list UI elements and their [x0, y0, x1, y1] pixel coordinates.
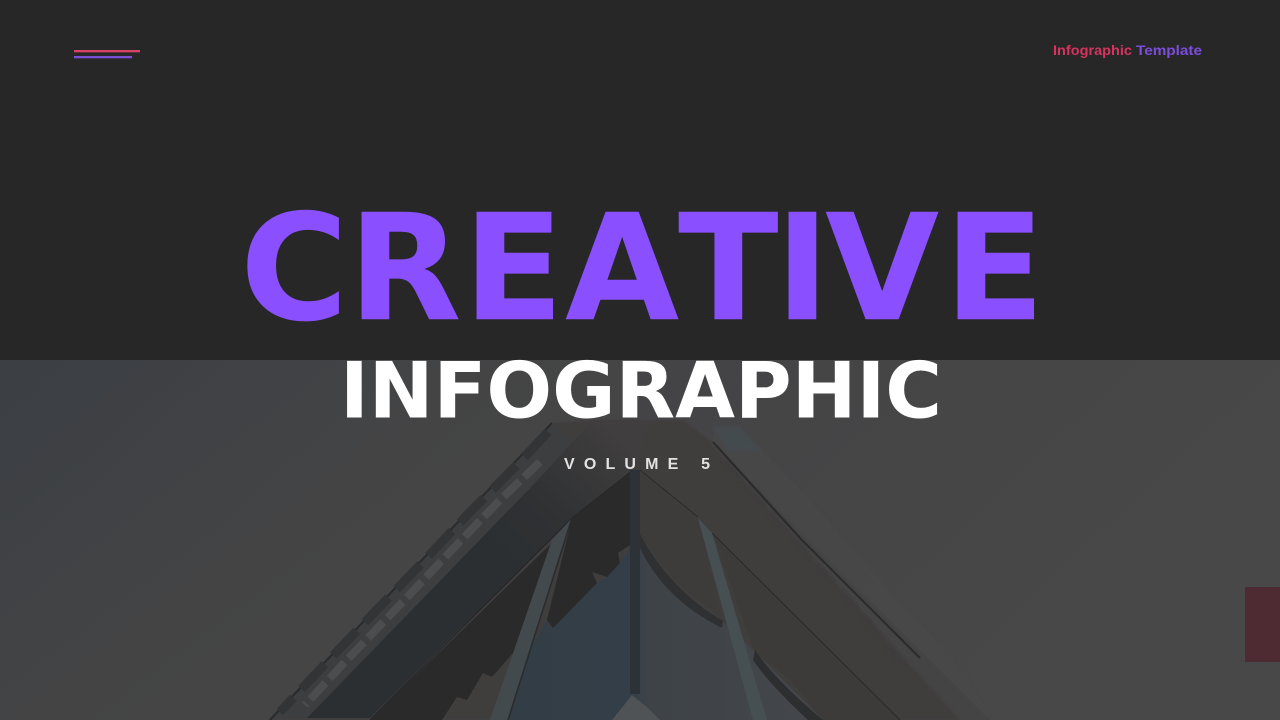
building: upper dark panel	[547, 470, 633, 628]
building: curved dark band	[640, 534, 723, 628]
building: central glass	[490, 535, 823, 720]
logo lines	[74, 50, 140, 58]
building: bottom tip	[612, 695, 660, 720]
dark top band	[0, 0, 1280, 360]
header label: Infographic	[1053, 43, 1133, 58]
background photo: sky and building	[0, 360, 1280, 720]
building: right dark rail	[713, 442, 920, 658]
title: infographic: INFOGRAPHIC	[340, 347, 942, 437]
building: left outer ledge	[270, 423, 575, 720]
header label: Template	[1136, 43, 1203, 58]
building: lower dark panel	[370, 533, 562, 720]
building: left dark band	[307, 420, 650, 718]
building: central mullion	[630, 470, 640, 694]
building: left strut	[490, 518, 572, 720]
title: creative: CREATIVE	[240, 182, 1045, 354]
header label	[1053, 43, 1203, 58]
building: right upper panel	[640, 470, 723, 620]
building: right lower panel	[712, 533, 900, 720]
subtitle: volume 5: VOLUME 5	[564, 456, 710, 473]
building: roof cap behind the title	[270, 420, 990, 720]
building: right strut	[698, 518, 767, 720]
red accent block	[1245, 587, 1280, 662]
building: right faint outer ledge	[713, 426, 990, 720]
clouds	[0, 360, 640, 720]
